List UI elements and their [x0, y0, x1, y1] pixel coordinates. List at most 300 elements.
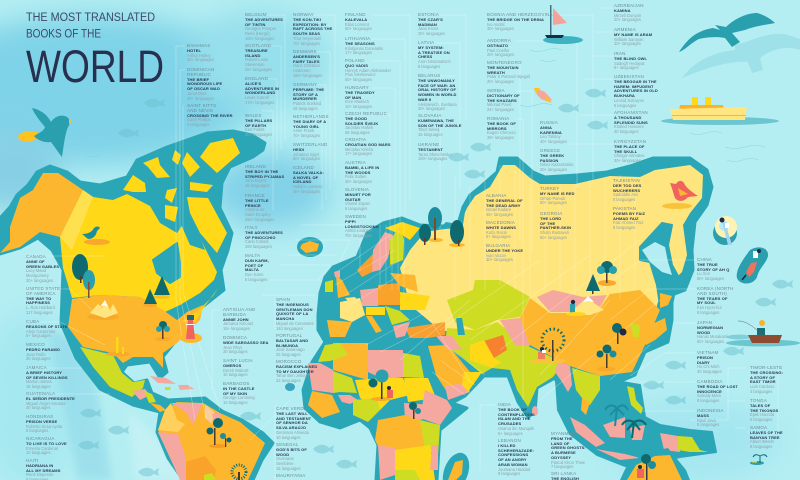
inlet light water — [642, 242, 672, 275]
entry: Austria: BAMBI, A LIFE IN — [345, 165, 379, 170]
entry: Mexico: MEXICO — [26, 342, 45, 347]
entry: France — [245, 194, 274, 222]
reader in Australia — [637, 454, 656, 480]
entry: Lebanon — [498, 439, 534, 477]
entry: Slovenia: MINUET FOR — [345, 192, 371, 197]
entry: Ukraine — [418, 142, 452, 161]
entry: Iran — [614, 52, 647, 71]
entry: Jamaica: Marlon James — [26, 379, 52, 384]
entry: Georgia: GEORGIA — [540, 211, 562, 216]
Hudson Bay — [153, 243, 180, 283]
entry: Malta — [245, 254, 269, 282]
entry: Ireland — [245, 165, 284, 189]
entry: Saint Kitts and Nevis: 5 languages — [187, 122, 209, 127]
entry: Scotland: Stevenson — [245, 62, 264, 67]
entry: Japan — [697, 321, 728, 345]
northern sea inlet — [640, 223, 678, 305]
entry: Saint Kitts and Nevis: AND NEVIS — [187, 108, 213, 113]
entry: Cambodia: 8 languages — [697, 398, 719, 403]
entry: Lebanon: ARAB WOMAN — [498, 462, 528, 467]
entry: Denmark: Hans Christian — [293, 63, 320, 68]
entry: Portugal: BLIMUNDA — [276, 342, 298, 348]
entry: Vietnam: VIETNAM — [697, 350, 718, 355]
entry: India: CRUSADES — [498, 421, 521, 426]
entry: Iceland: 30+ languages — [293, 189, 320, 194]
entry: Indonesia: MASS — [697, 413, 709, 418]
entry: Greece — [540, 148, 574, 172]
entry: Dominican Republic: DOMINICAN — [187, 67, 215, 72]
entry: Dominican Republic — [187, 67, 222, 101]
entry: India: INDIA — [498, 402, 511, 407]
entry: Georgia: 50+ languages — [540, 235, 567, 240]
entry: Macedonia: MACEDONIA — [486, 220, 515, 225]
entry: Guatemala: EL SEÑOR PRESIDENTE — [26, 396, 75, 401]
entry: Portugal: 25 languages — [276, 352, 301, 357]
entry: Wales — [245, 113, 272, 137]
entry: Timor-Leste: 4 languages — [750, 389, 772, 394]
entry: Russia: KARENINA — [540, 130, 562, 134]
entry: Croatia: 17+ languages — [345, 151, 372, 156]
entry: Croatia: CROATIAN GOD MARS — [345, 142, 391, 147]
entry: Tonga — [750, 399, 778, 423]
entry: Dominican Republic: OF OSCAR WAO — [187, 86, 220, 91]
entry: Scotland: ISLAND — [245, 52, 260, 58]
entry: France: FRANCE — [245, 193, 265, 198]
entry: Bahamas: 30+ languages — [187, 57, 214, 62]
entry: Georgia — [540, 211, 571, 240]
entry: Russia: Leo Tolstoy — [540, 134, 561, 139]
entry: Norway: THE KON-TIKI — [293, 17, 321, 22]
entry: Finland — [345, 12, 372, 31]
entry: Belarus: THE UNWOMANLY — [418, 78, 455, 83]
entry: Spain: THE INGENIOUS — [276, 302, 309, 307]
entry: China: CHINA — [697, 257, 712, 262]
entry: Estonia — [418, 12, 445, 36]
entry: Albania: ALBANIA — [486, 193, 506, 198]
Kazakhstan — [447, 280, 530, 330]
entry: Iceland: ICELAND — [293, 165, 314, 170]
entry: Andorra: Paul Coelho — [487, 48, 509, 52]
entry: Guatemala: Miguel Ángel Asturias — [26, 400, 65, 406]
entry: Sweden — [345, 214, 379, 238]
Scandinavia — [357, 222, 420, 277]
entry: Myanmar: FROM THE — [551, 436, 573, 441]
entry: Ukraine: 100+ languages — [418, 156, 447, 161]
entry: Saint Kitts and Nevis — [187, 103, 233, 127]
entry: Morocco: TO MY DAUGHTER — [276, 368, 314, 374]
entry: Belarus: Aleksievich, Svetlana — [418, 102, 457, 106]
South American trees — [206, 418, 246, 480]
entry: Russia: RUSSIA — [540, 120, 558, 125]
entry: Netherlands: THE DIARY OF A — [293, 119, 326, 124]
entry: Greece: 20+ languages — [540, 167, 567, 172]
entry: France: Saint-Exupéry — [245, 212, 271, 217]
entry: Uzbekistan: HAREM: IMPUDENT — [614, 84, 654, 88]
entry: Denmark: 160+ languages — [293, 73, 322, 78]
entry: Barbados: BARBADOS — [223, 381, 250, 386]
entry: Myanmar: MYANMAR — [551, 431, 575, 436]
entry: Montenegro: THE MOUNTAIN — [487, 65, 519, 70]
entry: Tajikistan: WUCHERERS — [613, 188, 640, 192]
cargo ship — [661, 97, 779, 125]
entry: Romania: THE BOOK OF — [487, 121, 516, 126]
entry: Andorra: 20+ languages — [487, 52, 514, 57]
entry: Pakistan: Faiz Ahmed Faiz — [613, 220, 644, 225]
entry: Belgium — [245, 12, 283, 41]
light rails over Eurasia — [335, 165, 660, 400]
entry: Norway: SOUTH SEAS — [293, 31, 320, 36]
entry: Netherlands: YOUNG GIRL — [293, 124, 319, 128]
entry: Azerbaijan: 20+ languages — [614, 17, 641, 22]
entry: Serbia — [487, 88, 520, 112]
entry: Belgium: Georges Prosper — [245, 26, 276, 31]
entry: Andorra: ANDORRA — [487, 38, 511, 43]
entry: Dominica — [223, 336, 268, 355]
entry: Cape Verde: OF SENHOR DA — [276, 420, 308, 425]
entry: Finland: FINLAND — [345, 12, 366, 17]
entry: Cuba: 5+ languages — [26, 333, 51, 338]
entry: Azerbaijan: KAMINA — [614, 8, 631, 13]
entry: Czech Republic — [345, 111, 387, 135]
entry: Serbia: DICTIONARY OF — [487, 93, 520, 98]
entry: Bosnia and Herzegovina: BOSNIA AND HERZEGOVINA — [487, 12, 553, 17]
entry: Tajikistan — [613, 179, 641, 203]
entry: Wales: THE PILLARS — [245, 118, 272, 123]
entry: Indonesia: Ravil Java — [697, 418, 716, 422]
entry: Senegal: SENEGAL — [276, 442, 299, 447]
entry: Wales: 30+ languages — [245, 132, 272, 137]
entry: Nicaragua — [26, 437, 67, 456]
icon: pink fish — [534, 88, 552, 103]
entry: Finland: KALEVALA — [345, 17, 367, 22]
entry: Honduras: 5 languages — [26, 428, 48, 433]
entry: United States: HAPPINESS — [26, 300, 50, 305]
entry: Romania: Eugen Chirovici — [487, 130, 516, 135]
entry: Kyrgyzstan — [614, 140, 646, 164]
entry: Romania — [487, 116, 516, 140]
entry: Belarus: 30+ languages — [418, 106, 445, 111]
entry: Cambodia: Somaly Mam — [697, 393, 721, 398]
entry: Belarus: ORAL HISTORY OF — [418, 87, 456, 92]
entry: Honduras: PRISON VERSE — [26, 419, 57, 424]
entry: Cape Verde — [276, 407, 311, 440]
entry: Lebanon: LEBANON — [498, 438, 521, 443]
entry: Senegal: WOOD — [276, 452, 289, 456]
entry: Canada — [26, 255, 59, 284]
entry: England: Lewis Carroll — [245, 95, 269, 100]
entry: Tonga: THE TIKONGS — [750, 408, 778, 412]
entry: Cambodia: INNOCENCE — [697, 388, 722, 394]
entry: Montenegro: MONTENEGRO — [487, 60, 522, 65]
entry: Afghanistan: A THOUSAND — [614, 115, 642, 120]
entry: Korea: Kim Hyon-hui — [697, 305, 722, 310]
entry: Korea: THE TEARS OF — [697, 296, 728, 300]
entry: Switzerland: SWITZERLAND — [293, 142, 327, 147]
entry: Bosnia and Herzegovina: 30+ languages — [487, 26, 514, 31]
entry: Cuba — [26, 320, 68, 339]
entry: Portugal — [276, 334, 308, 358]
entry: Iran: IRAN — [614, 51, 626, 56]
entry: Mauritania: MAURITANIA — [276, 473, 305, 478]
entry: Myanmar: GREEN GHOSTS: — [551, 445, 586, 450]
continent: Europe, Asia and Africa coast — [303, 158, 712, 480]
entry: Pakistan: POEMS BY FAIZ — [613, 211, 645, 216]
entry: Romania: 39+ languages — [487, 135, 514, 140]
entry: Malta: 5 languages — [245, 277, 267, 282]
Africa countries — [308, 343, 452, 480]
entry: Haiti: René Depestre — [26, 472, 54, 477]
entry: Sweden: SWEDEN — [345, 214, 366, 219]
entry: Cuba: Alejo Carpentier — [26, 328, 55, 334]
entry: Serbia: SERBIA — [487, 88, 505, 93]
entry: Armenia: William Saroyan — [614, 36, 644, 42]
entry: Estonia: THE CZAR'S — [418, 17, 443, 22]
entry: Slovenia — [345, 187, 371, 211]
entry: Norway: NORWAY — [293, 12, 314, 17]
title: The Most Translated Books of the: THE MOST TRANSLATED — [26, 10, 155, 24]
entry: Netherlands: 70+ languages — [293, 133, 320, 138]
entry: Sweden: LONGSTOCKING — [345, 224, 379, 228]
entry: Scotland: 26+ languages — [245, 67, 272, 72]
entry: Tajikistan: DER TOD DES — [613, 183, 641, 188]
entry: Pakistan: AHMAD FAIZ — [613, 216, 639, 220]
entry: Georgia: PANTHER-SKIN — [540, 225, 571, 230]
entry: Andorra — [487, 38, 514, 57]
entry: Cape Verde: Germano Almeida — [276, 430, 309, 435]
small island with palm — [750, 455, 767, 465]
Canary and Cape Verde islands — [285, 383, 295, 391]
entry: Georgia: OF THE — [540, 220, 555, 226]
entry: Belgium: Remi (Hergé) — [245, 31, 270, 36]
entry: Barbados: 10 languages — [223, 400, 248, 405]
entry: Hungary — [345, 85, 375, 109]
entry: Timor-Leste — [750, 366, 783, 394]
Russia and northern Asia — [400, 165, 703, 340]
entry: Vietnam: PRISON — [697, 355, 713, 360]
entry: Timor-Leste: A STORY OF — [750, 374, 775, 380]
Japan and Korea — [630, 293, 672, 345]
entry: Latvia: Aron Nimzowitsch — [418, 59, 451, 64]
entry: Dominica: 30 languages — [223, 349, 248, 354]
entry: Scotland — [245, 43, 272, 72]
entry: Iran: 8+ languages — [614, 65, 639, 70]
entry: Turkey: MY NAME IS RED — [540, 191, 575, 196]
entry: Ireland: John Boyne — [245, 178, 267, 183]
entry: Scotland: Robert Louis — [245, 57, 268, 62]
entry: Germany: GERMANY — [293, 82, 317, 87]
entry: Poland — [345, 58, 391, 82]
entry: Lebanon: OF AN ANGRY — [498, 457, 527, 462]
sailboat — [543, 5, 583, 44]
entry: Ukraine: UKRAINE — [418, 142, 439, 147]
entry: England: WONDERLAND — [245, 90, 275, 95]
entry: Iceland: SALKA VALKA: — [293, 170, 324, 175]
entry: Senegal: 15 languages — [276, 466, 301, 471]
entry: Saint Kitts and Nevis: CROSSING THE RIVER — [187, 112, 233, 118]
entry: Hungary: HUNGARY — [345, 85, 369, 90]
entry: Kyrgyzstan: Chingiz Aitmatov — [614, 153, 644, 158]
entry: Cambodia — [697, 380, 738, 404]
Europe countries — [325, 270, 430, 338]
entry: Saint Lucia: Derek Walcott — [223, 368, 249, 372]
entry: Mexico: PEDRO PARAMO — [26, 347, 60, 352]
Indochina — [555, 360, 600, 415]
mountain with reader in Mongolia — [566, 296, 604, 316]
India — [492, 353, 563, 407]
entry: Andorra: OSTINATO — [487, 43, 508, 48]
entry: Macedonia: 5+ languages — [486, 234, 511, 239]
entry: Croatia: Miroslav Krleža — [345, 146, 373, 152]
entry: Armenia: MY NAME IS ARAM — [614, 32, 652, 37]
entry: Czech Republic: CZECH REPUBLIC — [345, 111, 387, 116]
entry: Ireland: 46 languages — [245, 183, 270, 188]
entry: Afghanistan — [614, 111, 648, 135]
entry: Scotland: TREASURE — [245, 48, 268, 53]
fisherman — [726, 320, 800, 346]
entry: Lebanon: CONFESSIONS — [498, 452, 528, 457]
entry: Spain: Miguel de Cervantes — [276, 321, 314, 326]
Africa tree with reader — [368, 370, 393, 401]
entry: India: CONTEMPLATION: — [498, 412, 535, 416]
Indian tree and reader — [530, 329, 566, 364]
entry: Armenia — [614, 28, 652, 47]
entry: Turkey — [540, 186, 575, 205]
entry: Lebanon: I KILLED — [498, 443, 515, 448]
entry: Dominican Republic: REPUBLIC — [187, 72, 211, 77]
entry: China: STORY OF AH Q — [697, 266, 729, 272]
entry: Turkey: Orhan Pamuk — [540, 196, 565, 200]
entry: Bulgaria: BULGARIA — [486, 243, 510, 248]
entry: Norway: Thor Heyerdahl — [293, 36, 321, 41]
entry: Honduras: Roberto Sosa Ayala — [26, 424, 62, 428]
entry: Italy: THE ADVENTURES — [245, 230, 283, 235]
wave strokes — [80, 48, 765, 162]
entry: Mexico: Juan Rulfo — [26, 352, 46, 356]
entry: Indonesia: INDONESIA — [697, 408, 724, 413]
trees on North America west — [72, 254, 95, 298]
entry: Afghanistan: 30 languages — [614, 129, 639, 134]
entry: Russia — [540, 120, 567, 144]
entry: Belarus: FACE OF WAR: AN — [418, 82, 455, 88]
entry: Japan: JAPAN — [697, 320, 712, 325]
entry: China: Lu Xun — [697, 271, 710, 276]
entry: Dominica: WIDE SARGASSO SEA — [223, 340, 268, 345]
entry: Czech Republic: Jaroslav Hašek — [345, 125, 373, 130]
entry: Portugal: PORTUGAL — [276, 333, 302, 338]
entry: Slovakia: Tibor Sekelj — [418, 127, 439, 132]
entry: Malta: MALTA — [245, 253, 260, 258]
entry: Netherlands: NETHERLANDS — [293, 114, 329, 119]
entry: China — [697, 258, 729, 282]
entry: Malta: DUN KARM, — [245, 258, 269, 263]
entry: Morocco: MOROCCO — [276, 359, 301, 364]
entry: Tajikistan: TAJIKISTAN — [613, 178, 640, 183]
Alaska — [0, 173, 83, 253]
entry: Bulgaria — [486, 243, 523, 262]
entry: Antigua and Barbuda — [223, 308, 255, 332]
entry: Canada: GREEN GABLES — [26, 264, 59, 268]
entry: Poland: QUO VADIS — [345, 63, 368, 68]
entry: Austria: THE WOODS — [345, 170, 371, 174]
entry: Canada: Lucy Maud — [26, 268, 46, 273]
entry: Jamaica: OF SEVEN KILLINGS — [26, 374, 68, 380]
entry: Denmark: Andersen — [293, 68, 311, 73]
entry: Morocco: Tahar Ben Jelloun — [276, 373, 309, 378]
entry: Slovenia: Vitomil Zupan — [345, 201, 370, 206]
Indonesia islands — [570, 417, 680, 460]
entry: Haiti: ALL MY DREAMS — [26, 468, 60, 472]
entry: Tajikistan: 8 languages — [613, 197, 635, 202]
palm trees — [605, 405, 646, 438]
entry: Mexico — [26, 343, 60, 362]
entry: Norway: 70+ languages — [293, 40, 320, 46]
entry: Wales: OF EARTH — [245, 122, 266, 128]
entry: Denmark — [293, 49, 322, 78]
entry: Antigua and Barbuda: ANTIGUA AND — [223, 307, 255, 312]
entry: Afghanistan: SPLENDID SUNS — [614, 120, 648, 124]
entry: Albania — [486, 193, 523, 217]
entry: Lithuania — [345, 36, 383, 55]
entry: Antigua and Barbuda: ANNIE JOHN — [223, 316, 249, 322]
entry: Switzerland — [293, 142, 327, 161]
entry: Cape Verde: SILVA ARAÚJO — [276, 425, 306, 430]
entry: England: ALICE'S — [245, 81, 261, 86]
continent: North America coast — [0, 131, 273, 480]
entry: Slovenia: 6 languages — [345, 206, 367, 211]
entry: Austria: 30+ languages — [345, 179, 372, 184]
entry: Macedonia: Kočo Racin — [486, 230, 507, 234]
entry: United States: OF AMERICA — [26, 291, 56, 296]
entry: Jamaica — [26, 366, 68, 390]
entry: Wales: WALES — [245, 113, 262, 118]
entry: Myanmar: A BURMESE — [551, 450, 576, 455]
entry: Azerbaijan: AZERBAIJAN — [614, 3, 644, 8]
entry: Latvia: A TREATISE ON — [418, 50, 450, 54]
seagull shadow — [682, 34, 800, 78]
entry: Denmark: DENMARK — [293, 49, 317, 54]
entry: Montenegro: 20+ languages — [487, 79, 514, 84]
entry: Slovenia: SLOVENIA — [345, 187, 369, 192]
entry: Belgium: THE ADVENTURES — [245, 17, 283, 22]
entry: Lebanon: SCHEHERAZADE: — [498, 448, 534, 452]
mountains — [87, 300, 119, 320]
entry: Turkey: TURKEY — [540, 186, 559, 191]
Mexico and Central America — [80, 347, 166, 412]
entry: Austria — [345, 160, 379, 184]
entry: Latvia: 8 languages — [418, 64, 440, 69]
White Sea — [440, 205, 466, 228]
entry: Saint Lucia: OMEROS — [223, 363, 241, 368]
entry: Korea: KOREA (NORTH — [697, 286, 734, 291]
entry: Korea — [697, 287, 734, 316]
entry: Timor-Leste: TIMOR-LESTE — [750, 365, 782, 370]
entry: Dominican Republic: 30+ languages — [187, 96, 214, 100]
entry: Bahamas: HOTEL — [187, 48, 201, 53]
entry: Germany: Patrick Süskind — [293, 101, 321, 106]
entry: England: 170+ languages — [245, 100, 274, 105]
orange bird — [662, 181, 698, 209]
entry: Greece: GREECE — [540, 148, 560, 153]
entry: Lithuania: THE SEASONS — [345, 41, 375, 46]
entry: Serbia: 24+ languages — [487, 107, 514, 112]
entry: Armenia: 30+ languages — [614, 41, 641, 46]
entry: Myanmar — [551, 432, 586, 470]
entry: Netherlands: Anne Frank — [293, 128, 314, 133]
entry: Belarus — [418, 73, 457, 111]
entry: Morocco — [276, 360, 317, 384]
entry: Mexico: 30 languages — [26, 356, 51, 361]
entry: India: 6+ languages — [498, 430, 523, 436]
